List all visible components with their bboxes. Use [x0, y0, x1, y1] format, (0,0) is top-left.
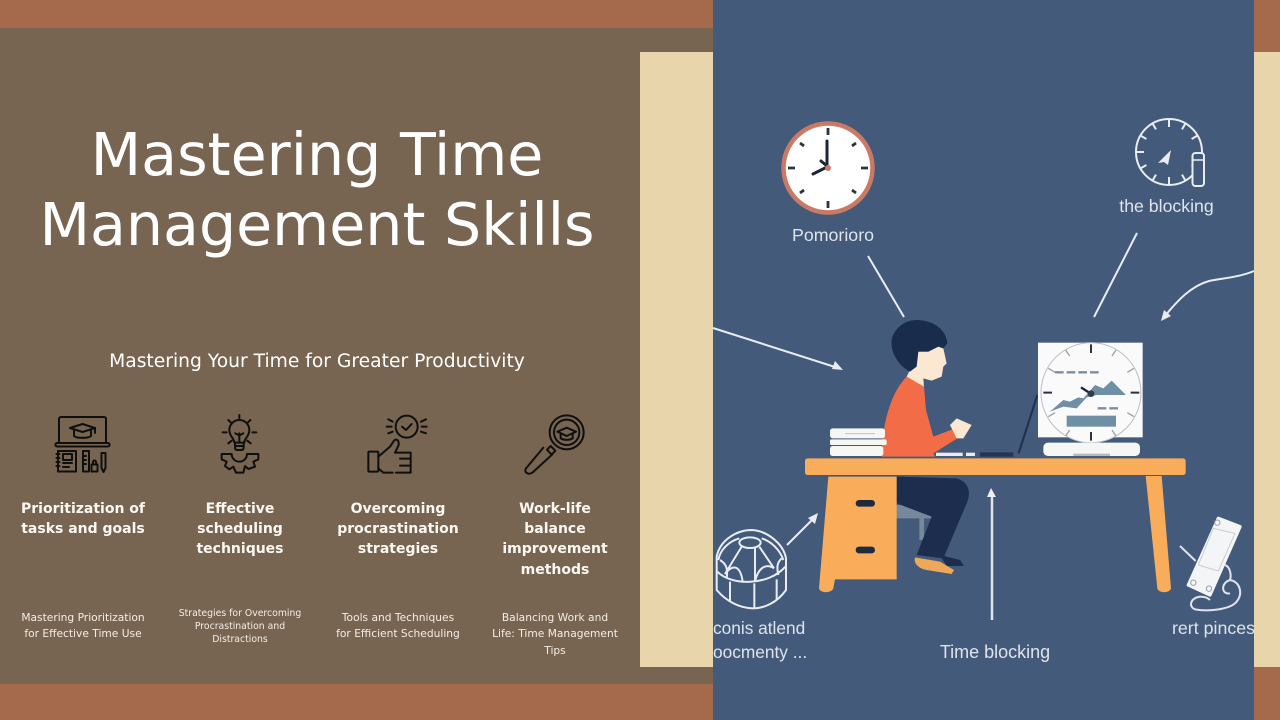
illustration: time management desk scene: [712, 0, 1255, 720]
panel: cream left strip: [640, 52, 713, 667]
description: prioritization: [21, 611, 145, 640]
title: Management Skills: [39, 191, 595, 259]
arrow: curved from right: [1161, 271, 1254, 321]
icon: thumbs up with check badge: [367, 414, 428, 474]
label: pocmenty: oocmenty ...: [713, 642, 807, 662]
heading: procrastination: [337, 501, 459, 557]
label: Pomorioro: Pomorioro: [792, 225, 874, 245]
panel: cream right strip: [1254, 52, 1280, 667]
monitor with clock and chart: [1038, 343, 1143, 456]
heading: work-life balance: [502, 501, 608, 578]
heading: procrastination: procrastination: [337, 521, 459, 537]
heading: prioritization: tasks and goals: [21, 521, 145, 537]
heading: scheduling: [196, 501, 284, 557]
heading: work-life balance: balance: [524, 521, 586, 537]
desk scene artwork: [805, 320, 1186, 592]
description: prioritization: Mastering Prioritization: [21, 611, 145, 624]
icon: light bulb over gear: [220, 414, 260, 474]
icon: stopwatch outline: [1136, 119, 1204, 186]
description: work and life: Balancing Work and: [502, 611, 608, 624]
panel: brown content background: [0, 28, 713, 684]
arrow: dome to desk: [787, 513, 818, 545]
heading: scheduling: Effective: [206, 501, 274, 517]
heading: prioritization: [21, 501, 146, 537]
icon: dome outline: [717, 530, 786, 608]
heading: scheduling: scheduling: [197, 521, 283, 537]
chair: [895, 505, 936, 540]
description: scheduling tools: for Efficient Scheduling: [336, 627, 460, 640]
icon: remote device with cord: [1180, 518, 1240, 610]
arrow: time blocking up: [987, 488, 996, 620]
desk: [805, 458, 1186, 592]
books stack: [830, 428, 887, 456]
label: rert pinces: rert pinces: [1172, 618, 1255, 638]
heading: work-life balance: Work-life: [519, 501, 591, 517]
heading: work-life balance: improvement: [502, 541, 608, 557]
arrow: from left edge: [713, 328, 843, 370]
icon: laptop with study tools: [54, 416, 110, 473]
description: work and life: [492, 611, 618, 657]
heading: scheduling: techniques: [196, 541, 284, 557]
title: Mastering Time: [91, 121, 543, 189]
arrow: pomodoro line: [868, 256, 904, 317]
figure: seated person: [882, 320, 972, 574]
label: Time blocking: Time blocking: [940, 642, 1050, 662]
icon: magnifier with graduation cap: [524, 414, 585, 475]
description: procrastination: [179, 608, 301, 645]
icon: pomodoro wall clock: [784, 124, 872, 212]
description: work and life: Tips: [544, 644, 566, 657]
heading: procrastination: strategies: [358, 541, 438, 557]
description: scheduling tools: [336, 611, 460, 640]
subtitle: Mastering Your Time for Greater Productivity: [109, 351, 525, 372]
description: prioritization: for Effective Time Use: [24, 627, 142, 640]
arrow: blocking line: [1094, 233, 1137, 317]
description: work and life: Life: Time Management: [492, 627, 618, 640]
heading: work-life balance: methods: [521, 562, 589, 578]
description: procrastination: Procrastination and: [195, 621, 285, 632]
description: procrastination: Distractions: [212, 634, 268, 645]
description: scheduling tools: Tools and Techniques: [342, 611, 454, 624]
title: [39, 121, 595, 259]
laptop and keyboard: [936, 395, 1037, 457]
heading: prioritization: Prioritization of: [21, 501, 145, 517]
heading: procrastination: Overcoming: [351, 501, 445, 517]
label: conis atlend: conis atlend: [713, 618, 805, 638]
label: the blocking: the blocking: [1119, 196, 1214, 216]
description: procrastination: Strategies for Overcoming: [179, 608, 301, 619]
